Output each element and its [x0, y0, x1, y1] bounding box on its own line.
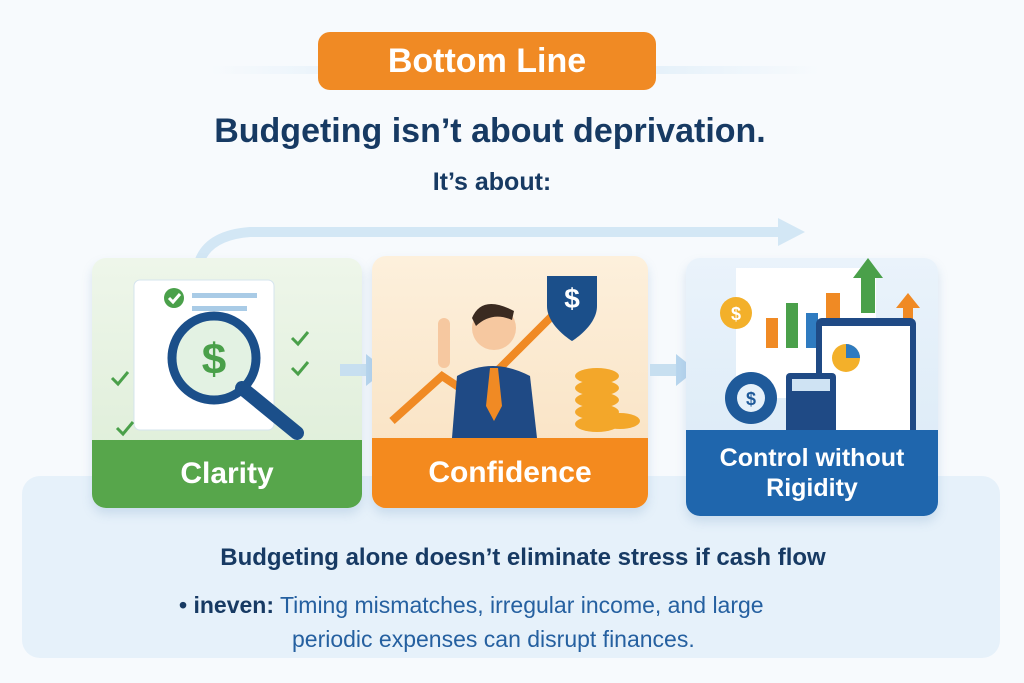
subheading: It’s about: [433, 168, 551, 196]
icon: charts, gear, calculator: $ [731, 304, 741, 324]
bullet text: Timing mismatches, irregular income, and large [280, 592, 764, 618]
bottom panel [22, 476, 1000, 658]
icon: businessman with shield and coins: $ [564, 283, 580, 314]
icon: document with magnifier [111, 280, 309, 440]
label: Clarity: Clarity [180, 457, 274, 490]
icon: businessman with shield and coins [389, 276, 640, 438]
arrow: 1 to 2 [340, 354, 372, 386]
bullet text: • ineven: [179, 592, 274, 618]
bullet text [179, 592, 764, 652]
card: confidence [372, 256, 648, 508]
title pill: Bottom Line [388, 42, 586, 80]
icon: document with magnifier: $ [202, 335, 226, 384]
bullet text: periodic expenses can disrupt finances. [292, 626, 695, 652]
label: Clarity [92, 440, 362, 508]
label: Confidence [372, 438, 648, 508]
bottom heading: Budgeting alone doesn’t eliminate stress if cash flow [220, 544, 826, 571]
label: Control without Rigidity [686, 430, 938, 516]
arrow: top curved [196, 218, 805, 258]
label: Control without Rigidity: Rigidity [766, 474, 858, 502]
label: Confidence: Confidence [428, 456, 592, 489]
label: Control without Rigidity: Control without [720, 444, 904, 472]
top decorative line [210, 66, 820, 74]
card: clarity [92, 258, 362, 508]
card: control [686, 258, 938, 516]
arrow: 2 to 3 [650, 354, 686, 386]
headline: Budgeting isn’t about deprivation. [214, 112, 766, 150]
icon: charts, gear, calculator [720, 258, 920, 430]
title pill [318, 32, 656, 90]
icon: charts, gear, calculator: $ [746, 389, 756, 409]
